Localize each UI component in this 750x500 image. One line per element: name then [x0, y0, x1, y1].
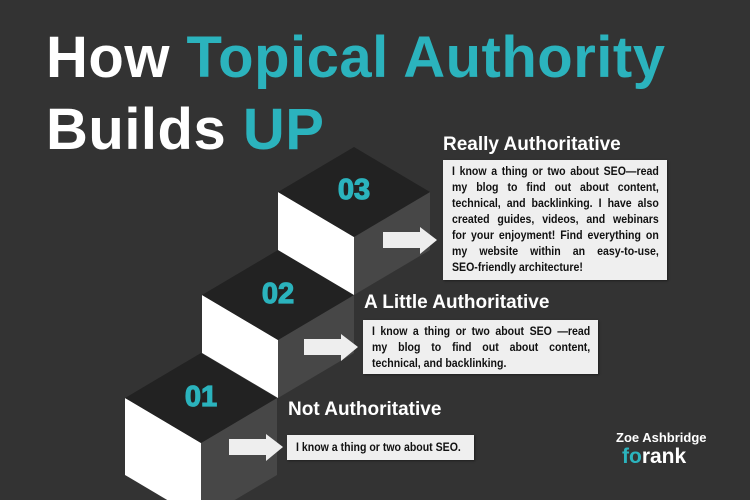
arrow 2 [304, 334, 358, 361]
box 3: my blog to find out about content, [452, 180, 659, 194]
box 3: for your enjoyment! Find everything on [452, 228, 659, 242]
logo: forank [622, 445, 686, 468]
cube 1: 01 [185, 381, 217, 413]
logo [616, 430, 707, 468]
box 3: I know a thing or two about SEO—read [452, 164, 659, 178]
box 1 [287, 435, 474, 460]
box 3: technical, and backlinking. I have also [452, 196, 659, 210]
heading 1: Not Authoritative [288, 399, 441, 420]
logo: Zoe Ashbridge [616, 430, 707, 445]
box 2: my blog to find out about content, [372, 340, 590, 354]
title [46, 25, 665, 162]
box 1: I know a thing or two about SEO. [296, 440, 461, 454]
box 2 [363, 320, 598, 374]
box 3: my website within an easy-to-use, [452, 244, 659, 258]
box 2: I know a thing or two about SEO —read [372, 324, 590, 338]
cube 2 [202, 250, 354, 398]
cube 1 [125, 353, 277, 500]
arrow 1 [229, 434, 283, 461]
heading 2: A Little Authoritative [364, 292, 549, 313]
box 3: SEO-friendly architecture! [452, 260, 583, 274]
box 2: technical, and backlinking. [372, 356, 506, 370]
cube 3 [278, 147, 430, 295]
title: Builds UP [46, 97, 324, 162]
box 3: created guides, videos, and webinars [452, 212, 659, 226]
arrow 3 [383, 227, 437, 254]
cube 3: 03 [338, 174, 370, 206]
cube 2: 02 [262, 278, 294, 310]
title: How Topical Authority [46, 25, 665, 90]
heading 3: Really Authoritative [443, 134, 621, 155]
box 3 [443, 160, 667, 280]
